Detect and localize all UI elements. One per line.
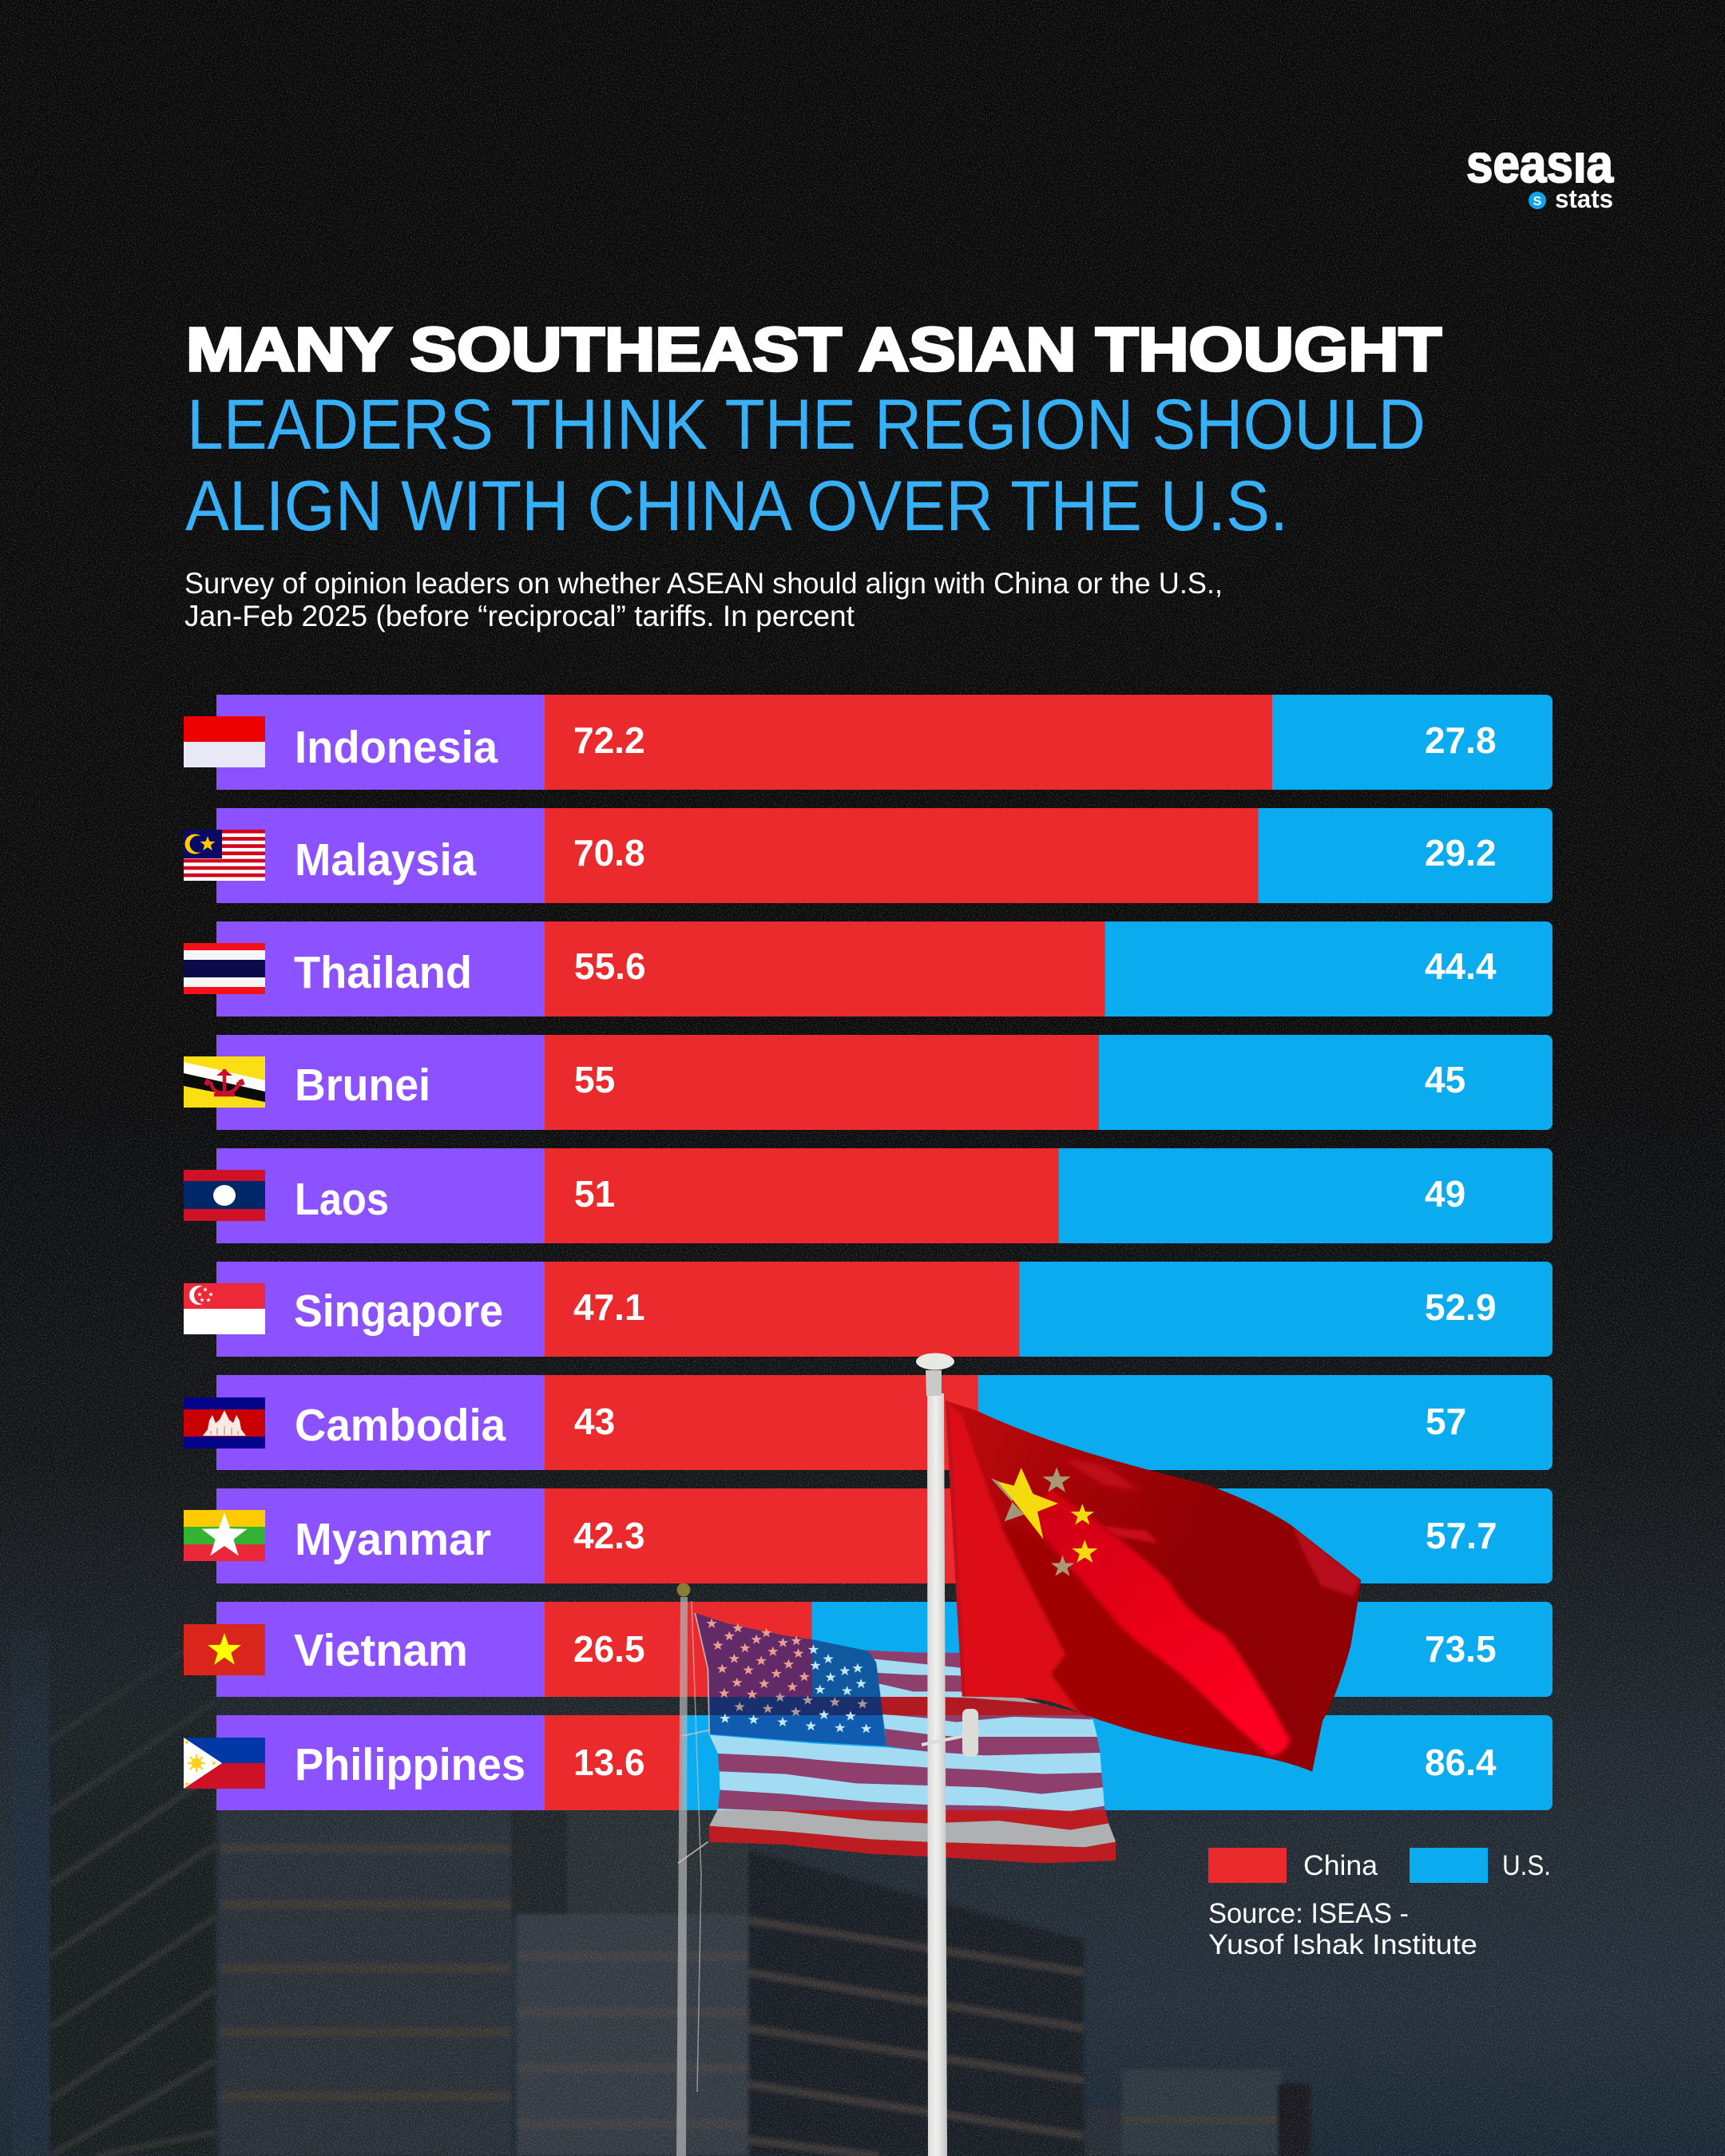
row: Brunei: 55 xyxy=(574,1059,615,1100)
flag cloth xyxy=(940,1397,1368,1776)
legend xyxy=(1208,1848,1551,1883)
subtitle: Survey of opinion leaders on whether ASEAN should align with China or the U.S., xyxy=(184,567,1223,600)
logo: seasia stats: stats xyxy=(1555,184,1613,213)
row: Philippines: 86.4 xyxy=(1425,1742,1497,1783)
bar chart xyxy=(184,695,1552,1810)
row: Indonesia: 72.2 xyxy=(573,719,645,761)
flag halyard weight xyxy=(922,1709,979,1757)
stars xyxy=(706,1619,871,1733)
US flag xyxy=(678,1613,1116,1863)
row: Laos: Laos xyxy=(295,1174,389,1225)
row: Malaysia: Malaysia xyxy=(295,834,477,886)
row: Thailand: 44.4 xyxy=(1425,945,1497,987)
source: Source: ISEAS - xyxy=(1208,1898,1409,1929)
row: Malaysia: 29.2 xyxy=(1425,832,1497,874)
row: Brunei xyxy=(184,1035,1552,1130)
title: MANY SOUTHEAST ASIAN THOUGHT xyxy=(186,315,1441,384)
row: Brunei: Brunei xyxy=(295,1060,430,1111)
source xyxy=(1208,1898,1477,1960)
row: Thailand: 55.6 xyxy=(574,945,646,987)
subtitle: Jan-Feb 2025 (before “reciprocal” tariffs. In percent xyxy=(184,600,855,632)
legend: U.S. xyxy=(1502,1850,1551,1881)
China flag xyxy=(940,1397,1368,1776)
row: Myanmar: Myanmar xyxy=(295,1514,491,1565)
row: Vietnam: 26.5 xyxy=(573,1628,645,1670)
subtitle xyxy=(184,567,1223,632)
row: Philippines: Philippines xyxy=(295,1739,525,1790)
row: Malaysia xyxy=(184,808,1552,903)
source: Yusof Ishak Institute xyxy=(1208,1929,1477,1960)
legend: China xyxy=(1303,1850,1378,1881)
small flagpole xyxy=(676,1583,701,2156)
row: Indonesia: Indonesia xyxy=(295,722,498,773)
background buildings xyxy=(14,1711,1311,2156)
row: Singapore: 47.1 xyxy=(573,1286,645,1328)
logo: seasia stats: S xyxy=(1533,195,1542,208)
row: Laos: 49 xyxy=(1425,1173,1465,1215)
large flagpole xyxy=(916,1353,954,2156)
row: Indonesia: 27.8 xyxy=(1425,719,1497,761)
logo: seasia stats xyxy=(1467,153,1615,209)
row: Vietnam xyxy=(184,1602,1552,1697)
row: Cambodia: 43 xyxy=(574,1401,615,1442)
china stars xyxy=(991,1467,1097,1576)
title xyxy=(185,315,1441,545)
canton xyxy=(695,1613,886,1746)
row: Thailand: Thailand xyxy=(294,947,472,998)
row: Laos: 51 xyxy=(574,1173,615,1215)
row: Myanmar: 57.7 xyxy=(1426,1515,1497,1556)
row: Myanmar: 42.3 xyxy=(573,1515,645,1556)
row: Cambodia: Cambodia xyxy=(295,1400,506,1451)
row: Thailand xyxy=(184,921,1552,1017)
row: Singapore xyxy=(184,1262,1552,1357)
stripes xyxy=(709,1651,1116,1863)
row: Laos xyxy=(184,1148,1552,1243)
title: ALIGN WITH CHINA OVER THE U.S. xyxy=(185,466,1288,545)
row: Indonesia xyxy=(184,695,1552,790)
row: Myanmar xyxy=(184,1488,1552,1583)
row: Cambodia xyxy=(184,1375,1552,1470)
row: Singapore: 52.9 xyxy=(1425,1286,1497,1328)
logo: seasia stats: seasia xyxy=(1466,133,1614,194)
row: Cambodia: 57 xyxy=(1426,1401,1466,1442)
row: Vietnam: Vietnam xyxy=(294,1625,468,1676)
row: Philippines xyxy=(184,1715,1552,1810)
row: Philippines: 13.6 xyxy=(573,1742,645,1783)
row: Malaysia: 70.8 xyxy=(573,832,645,874)
title: LEADERS THINK THE REGION SHOULD xyxy=(187,384,1426,464)
row: Vietnam: 73.5 xyxy=(1425,1628,1497,1670)
row: Singapore: Singapore xyxy=(294,1286,503,1337)
row: Brunei: 45 xyxy=(1425,1059,1465,1100)
